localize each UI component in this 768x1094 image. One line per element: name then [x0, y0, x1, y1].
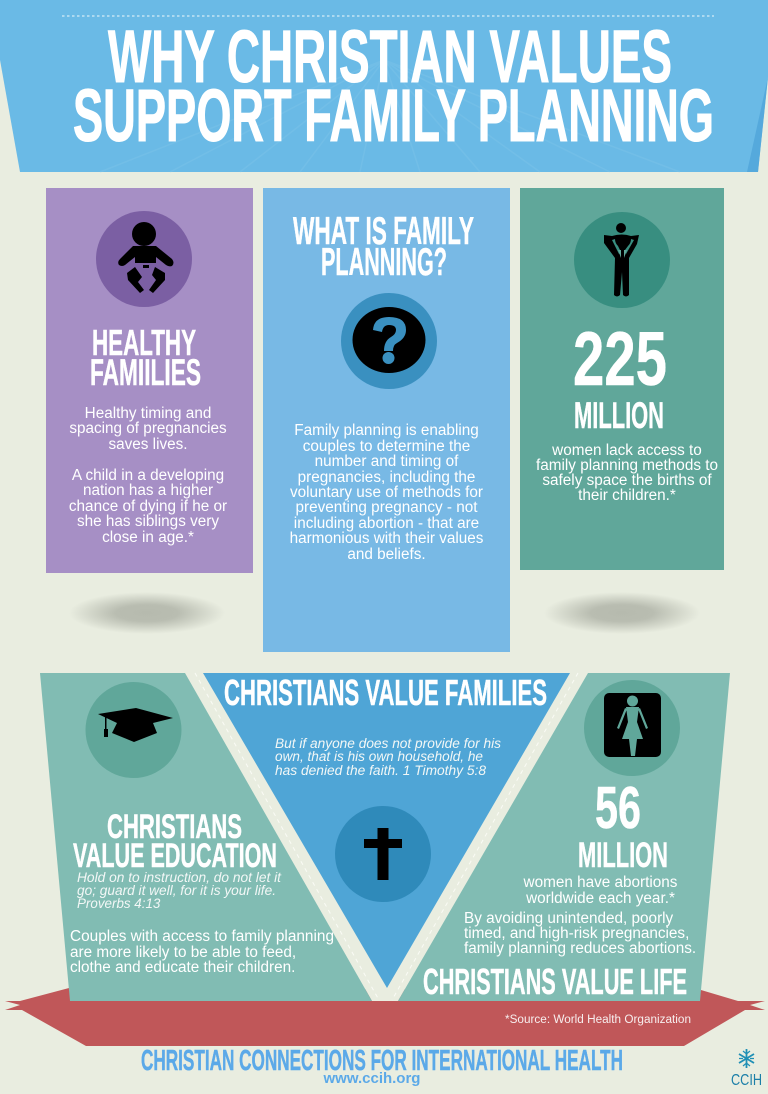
stat: 225 million: 225 — [573, 317, 667, 402]
panel: 225 million — [520, 188, 724, 570]
verse: 1 timothy — [275, 736, 501, 778]
heading: healthy families: FAMIILIES — [90, 352, 201, 393]
text: women lack access — [536, 442, 718, 504]
text: by avoiding: timed, and high-risk pregnancies, — [464, 925, 689, 942]
text: family planning definition: preventing pregnancy - not — [296, 499, 478, 516]
panel: christians value life — [398, 673, 730, 1002]
text: by avoiding: By avoiding unintended, poorly — [464, 910, 674, 927]
heading: what is family planning: PLANNING? — [321, 241, 447, 284]
heading: christians value education — [73, 808, 277, 875]
verse: proverbs: Hold on to instruction, do not let it — [77, 870, 282, 885]
title — [73, 15, 714, 157]
text: healthy families: spacing of pregnancies — [69, 420, 227, 437]
stat: 225 million — [573, 317, 667, 436]
text: couples with access: clothe and educate their children. — [70, 959, 295, 976]
heading: what is family planning — [293, 210, 474, 284]
heading: what is family planning: WHAT IS FAMILY — [293, 210, 474, 253]
text: healthy families: nation has a higher — [83, 482, 213, 499]
source note: *Source: World Health Organization — [505, 1014, 691, 1026]
text: healthy families: chance of dying if he or — [69, 498, 227, 515]
text: women lack access: their children.* — [578, 487, 676, 504]
text: women lack access: safely space the births of — [542, 472, 712, 489]
text: couples with access — [70, 928, 334, 976]
shadow: left — [69, 592, 225, 634]
icon: cross — [335, 806, 431, 902]
text: healthy families: close in age.* — [102, 529, 194, 546]
icon: woman sign — [584, 680, 680, 776]
panel: christians value education — [40, 673, 372, 1001]
heading: christians value education: CHRISTIANS — [107, 808, 242, 846]
text: women lack access: family planning methods to — [536, 457, 718, 474]
icon: father and child — [574, 212, 670, 308]
heading: christians value families: CHRISTIANS VALUE FAMILIES — [224, 672, 547, 713]
text: couples with access: are more likely to be able to feed, — [70, 944, 296, 961]
verse: proverbs: Proverbs 4:13 — [77, 896, 161, 911]
text: healthy families: saves lives. — [108, 436, 188, 453]
footer url: www.ccih.org — [323, 1070, 420, 1087]
text: healthy families: A child in a developing — [72, 467, 224, 484]
shadow: right — [544, 592, 700, 634]
text: healthy families: she has siblings very — [77, 513, 219, 530]
text: women have abortions — [523, 874, 678, 907]
text: family planning definition: voluntary use of methods for — [290, 484, 483, 501]
red ribbon — [5, 988, 765, 1046]
text: by avoiding: family planning reduces abortions. — [464, 940, 696, 957]
heading: healthy families: HEALTHY — [92, 322, 196, 363]
verse: 1 timothy: But if anyone does not provide for his — [275, 736, 501, 751]
text: family planning definition: number and timing of — [315, 453, 459, 470]
text: family planning definition: harmonious with their values — [290, 530, 484, 547]
icon: question mark — [341, 293, 437, 389]
text: family planning definition: pregnancies, including the — [298, 469, 475, 486]
text: family planning definition — [290, 422, 484, 563]
text: healthy families — [69, 405, 227, 546]
text: family planning definition: Family planning is enabling — [294, 422, 479, 439]
icon: graduation cap — [86, 682, 182, 778]
stat: 56 million: MILLION — [578, 836, 668, 875]
stat: 225 million: MILLION — [574, 395, 664, 436]
stat: 56 million — [578, 775, 668, 875]
text: women lack access: women lack access to — [551, 442, 702, 459]
verse: 1 timothy: own, that is his own household, he — [275, 749, 483, 764]
text: by avoiding — [464, 910, 696, 957]
text: healthy families: Healthy timing and — [85, 405, 211, 422]
text: family planning definition: couples to determine the — [303, 438, 470, 455]
heading: christians value education: VALUE EDUCATION — [73, 837, 277, 875]
text: women have abortions: worldwide each year.* — [525, 890, 675, 907]
header banner — [0, 0, 768, 172]
verse: 1 timothy: has denied the faith. 1 Timothy 5:8 — [275, 763, 487, 778]
panel: what is family planning — [263, 188, 510, 652]
text: couples with access: Couples with access to family planning — [70, 928, 334, 945]
panel: christians value families — [203, 672, 570, 988]
heading: healthy families — [90, 322, 201, 393]
icon: baby — [96, 211, 192, 307]
stat: 56 million: 56 — [595, 775, 641, 841]
verse: proverbs: go; guard it well, for it is your life. — [77, 883, 276, 898]
logo: CCIH — [731, 1049, 762, 1089]
text: family planning definition: including abortion - that are — [294, 515, 479, 532]
panel: healthy families — [46, 188, 253, 573]
text: women have abortions: women have abortions — [523, 874, 678, 891]
verse: proverbs — [77, 870, 282, 911]
text: family planning definition: and beliefs. — [347, 546, 426, 563]
